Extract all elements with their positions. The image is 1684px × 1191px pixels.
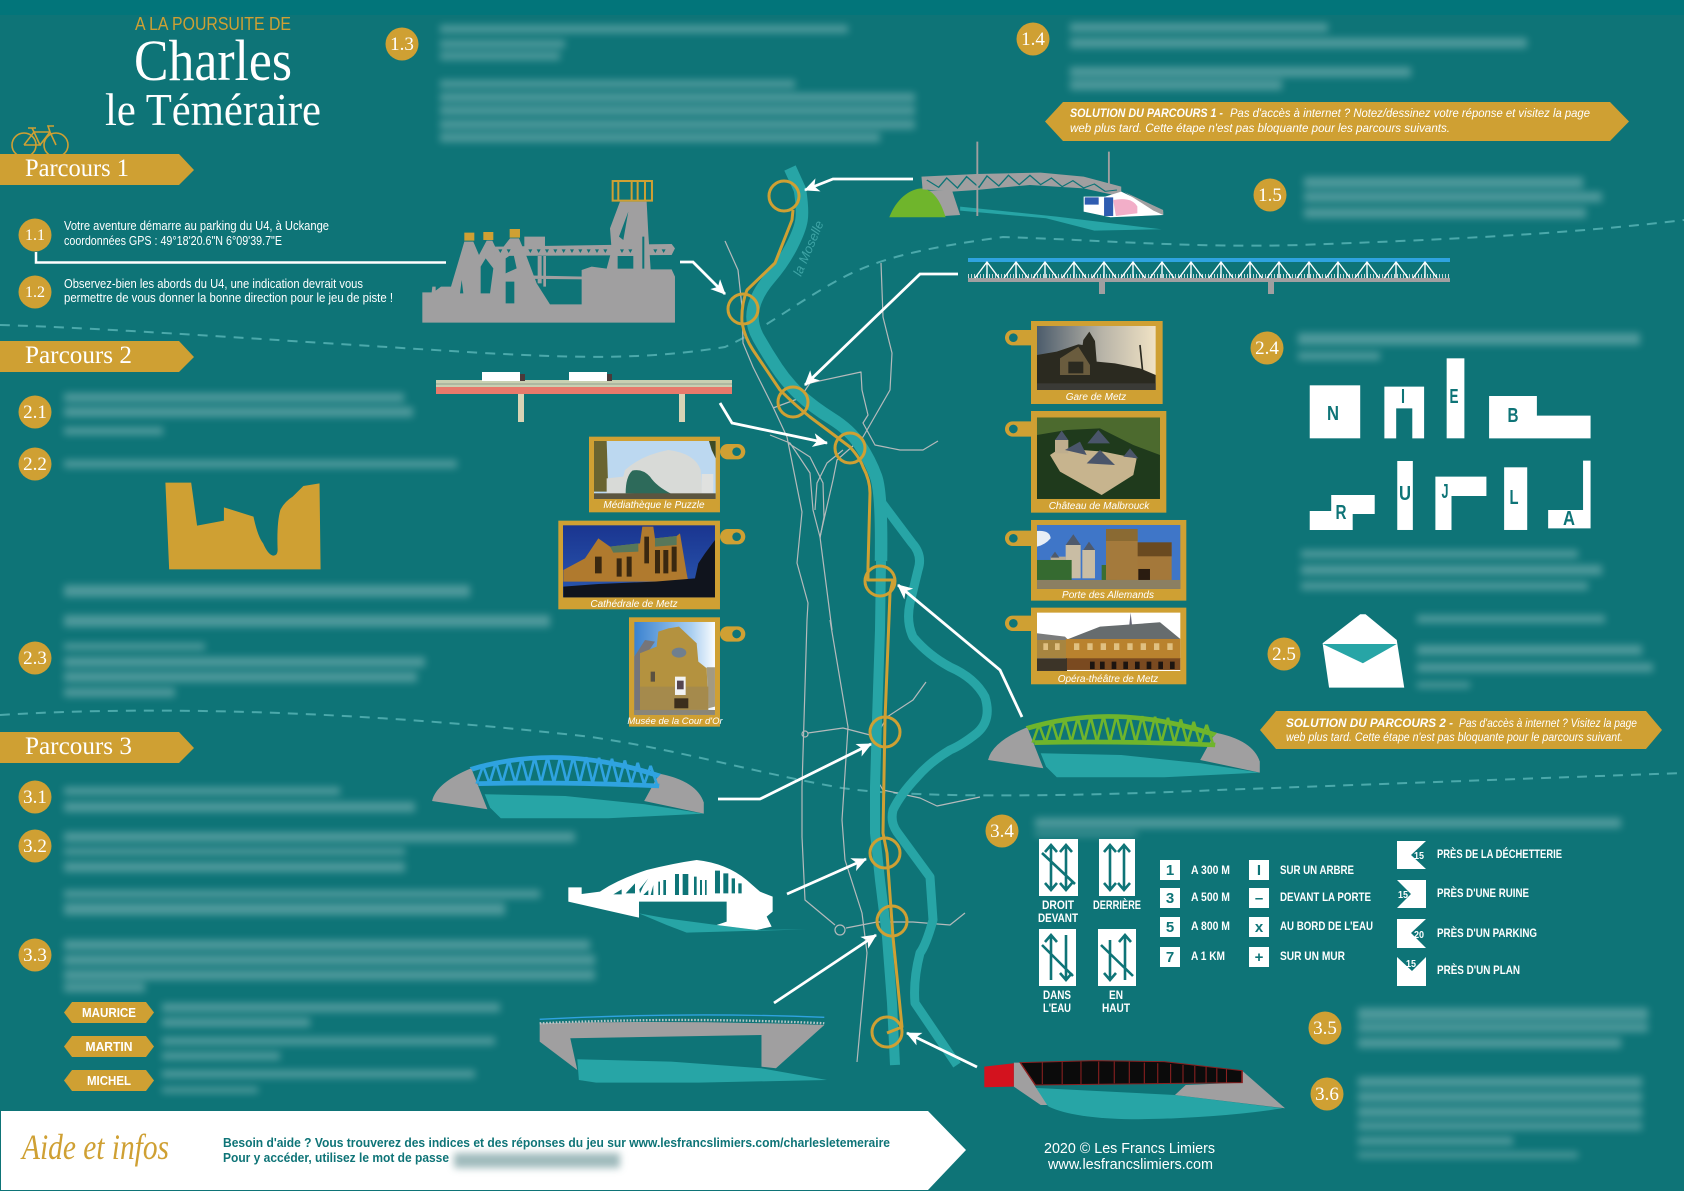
- step 1.2: 1.2: [25, 284, 45, 301]
- step 1.3: [386, 28, 418, 60]
- title: le Téméraire: [105, 84, 321, 135]
- text block 1.4 (blurred): [1070, 23, 1527, 90]
- step 1.1: 1.1: [25, 227, 45, 244]
- text block 2.3 (blurred): [64, 643, 425, 697]
- step 1.5: [1254, 178, 1286, 212]
- legend: trail markers: 15: [1406, 959, 1416, 970]
- legend: direction signs: DROIT: [1042, 900, 1074, 912]
- photo: Porte des Allemands: Porte des Allemands: [1062, 590, 1154, 601]
- callout: solution parcours 1: [1045, 102, 1629, 141]
- callout: solution parcours 2: web plus tard. Cette étape n'est pas bloquante pour le parcours suivant.: [1286, 730, 1623, 744]
- step 2.1: [18, 396, 52, 428]
- illustration: bridge 1.4: [889, 142, 1163, 231]
- text block 1.3 (blurred): [440, 25, 915, 142]
- step 1.1: coordonnées GPS : 49°18'20.6"N 6°09'39.7"E: [64, 233, 282, 248]
- legend: trail markers: 15: [1398, 890, 1408, 901]
- text block 2.4 (blurred): [1298, 333, 1640, 360]
- tag: Martin: [64, 1036, 154, 1057]
- legend: direction signs: DEVANT: [1038, 913, 1078, 925]
- legend: symbol codes: AU BORD DE L'EAU: [1280, 921, 1373, 933]
- illustration: white arch bridge: [568, 860, 807, 933]
- illustration: road bridge 2.1: [436, 372, 732, 422]
- legend: number codes: A 1 KM: [1191, 951, 1225, 963]
- text block 3.3 (blurred): [64, 940, 595, 992]
- step 1.2: [18, 276, 393, 308]
- text block 3.1 (blurred): [64, 787, 415, 812]
- label: la Moselle: la Moselle: [790, 218, 827, 278]
- puzzle: letter blocks: L: [1510, 487, 1518, 509]
- illustration: blue bridge: [432, 757, 704, 818]
- step 3.2: [18, 830, 52, 862]
- puzzle: letter blocks: A: [1563, 508, 1575, 530]
- legend: symbol codes: SUR UN ARBRE: [1280, 865, 1354, 877]
- step 3.6: [1310, 1078, 1344, 1110]
- legend: trail markers: [1397, 841, 1562, 986]
- panel: parcours 2 banner: [0, 341, 194, 372]
- step 1.5: 1.5: [1258, 185, 1282, 206]
- step 2.2: [18, 448, 52, 480]
- legend: direction signs: DERRIÈRE: [1093, 899, 1141, 912]
- step 3.6: 3.6: [1315, 1084, 1339, 1105]
- connector: step 1.1 to U4: [36, 252, 446, 262]
- legend: direction signs: L'EAU: [1043, 1003, 1071, 1015]
- callout: solution parcours 1: Pas d'accès à internet ? Notez/dessinez votre réponse et visitez la page: [1230, 106, 1590, 120]
- step 1.4: [1016, 22, 1050, 56]
- step 3.1: [18, 780, 52, 814]
- map: river Moselle: [752, 168, 987, 1065]
- legend: number codes: 5: [1166, 919, 1174, 936]
- credits: www.lesfrancslimiers.com: [1047, 1156, 1213, 1173]
- step 2.5: 2.5: [1272, 644, 1296, 665]
- photo: Opéra-théâtre de Metz: [1005, 608, 1186, 685]
- tag: Maurice: MAURICE: [82, 1005, 136, 1020]
- legend: number codes: A 300 M: [1191, 865, 1230, 877]
- step 1.1: [18, 218, 329, 252]
- illustration: U4 blast furnace: [422, 181, 675, 323]
- step 3.2: 3.2: [23, 836, 47, 857]
- callout: solution parcours 2: SOLUTION DU PARCOURS 2 -: [1286, 716, 1453, 730]
- puzzle: letter blocks: I: [1401, 386, 1405, 408]
- step 3.4: [986, 814, 1018, 848]
- photo: Château de Malbrouck: [1005, 411, 1166, 513]
- step 2.1: 2.1: [23, 402, 47, 423]
- puzzle: letter blocks: U: [1399, 483, 1411, 505]
- puzzle: letter blocks: N: [1327, 403, 1339, 425]
- panel: parcours 1 banner: [0, 154, 194, 185]
- tag: Maurice: [64, 1002, 154, 1023]
- callout: solution parcours 1: web plus tard. Cette étape n'est pas bloquante pour les parcours suivants.: [1070, 121, 1450, 135]
- photo: Musée de la Cour d'Or: Musée de la Cour d'Or: [627, 716, 723, 727]
- step 2.3: 2.3: [23, 648, 47, 669]
- legend: symbol codes: +: [1255, 949, 1264, 966]
- tag: Michel: MICHEL: [87, 1073, 131, 1088]
- panel: aide et infos footer: Besoin d'aide ? Vous trouverez des indices et des réponses du jeu sur www.lesfrancslimiers.com/charlesletemeraire: [223, 1135, 890, 1150]
- photo: Cathédrale de Metz: Cathédrale de Metz: [590, 599, 678, 610]
- step 1.2: permettre de vous donner la bonne direction pour le jeu de piste !: [64, 290, 393, 305]
- puzzle: letter blocks: [1310, 358, 1591, 530]
- puzzle: letter blocks: E: [1450, 386, 1458, 408]
- step 1.1: Votre aventure démarre au parking du U4, à Uckange: [64, 218, 329, 233]
- text block 3.6 (blurred): [1358, 1077, 1642, 1158]
- text block 2.2 (blurred): [64, 460, 457, 468]
- legend: number codes: A 800 M: [1191, 921, 1230, 933]
- panel: aide et infos footer: Pour y accéder, utilisez le mot de passe: [223, 1150, 449, 1165]
- credits: [1044, 1140, 1215, 1173]
- step 3.5: 3.5: [1313, 1018, 1337, 1039]
- legend: symbol codes: –: [1255, 890, 1263, 907]
- photo: Opéra-théâtre de Metz: Opéra-théâtre de Metz: [1058, 674, 1158, 685]
- credits: 2020 © Les Francs Limiers: [1044, 1140, 1215, 1157]
- step 2.5: [1268, 638, 1300, 670]
- callout: solution parcours 1: SOLUTION DU PARCOURS 1 -: [1070, 106, 1223, 120]
- panel: parcours 2 banner: Parcours 2: [25, 342, 132, 369]
- step 3.3: [18, 938, 52, 972]
- legend: symbol codes: SUR UN MUR: [1280, 951, 1346, 963]
- icon: envelope: [1323, 614, 1404, 688]
- step 1.3: 1.3: [390, 34, 414, 55]
- step 2.3: [18, 642, 52, 674]
- text block 3.5 (blurred): [1358, 1008, 1648, 1048]
- legend: symbol codes: [1249, 860, 1373, 967]
- step 2.4: 2.4: [1255, 338, 1279, 359]
- legend: trail markers: PRÈS D'UN PLAN: [1437, 964, 1520, 977]
- title: Charles: [134, 28, 292, 93]
- photo: Médiathèque le Puzzle: [589, 437, 745, 512]
- legend: number codes: 1: [1166, 862, 1174, 879]
- photo: Porte des Allemands: [1005, 520, 1186, 601]
- puzzle: letter blocks: J: [1442, 481, 1448, 503]
- callout: solution parcours 2: Pas d'accès à internet ? Visitez la page: [1459, 716, 1637, 730]
- illustration: green bridge: [988, 716, 1260, 777]
- panel: parcours 3 banner: [0, 732, 194, 763]
- illustration: gold skyline shape: [165, 483, 321, 569]
- legend: symbol codes: DEVANT LA PORTE: [1280, 892, 1371, 904]
- photo: Gare de Metz: [1005, 321, 1163, 404]
- photo: Gare de Metz: Gare de Metz: [1066, 392, 1126, 403]
- title: [105, 14, 321, 135]
- illustration: truss bridge 1.5: [968, 258, 1450, 294]
- step 3.4: 3.4: [990, 821, 1014, 842]
- legend: trail markers: PRÈS D'UNE RUINE: [1437, 887, 1529, 900]
- legend: trail markers: PRÈS D'UN PARKING: [1437, 927, 1537, 940]
- legend: trail markers: 20: [1414, 930, 1424, 941]
- legend: number codes: 7: [1166, 949, 1174, 966]
- legend: direction signs: DANS: [1043, 990, 1071, 1002]
- step 1.2: Observez-bien les abords du U4, une indication devrait vous: [64, 276, 363, 291]
- legend: number codes: A 500 M: [1191, 892, 1230, 904]
- legend: number codes: [1160, 860, 1230, 967]
- step 3.5: [1308, 1012, 1342, 1044]
- text block 2.1 (blurred): [64, 393, 413, 435]
- legend: symbol codes: x: [1255, 919, 1264, 936]
- panel: parcours 1 banner: Parcours 1: [25, 155, 129, 182]
- legend: direction signs: EN: [1109, 990, 1123, 1002]
- photo: Château de Malbrouck: Château de Malbrouck: [1049, 501, 1150, 512]
- text block 1.5 (blurred): [1304, 177, 1602, 218]
- legend: direction signs: [1038, 839, 1141, 1015]
- map: gold cycle route: [728, 181, 907, 1047]
- icon: bicycle: [12, 126, 68, 157]
- panel: parcours 3 banner: Parcours 3: [25, 733, 132, 760]
- step 1.4: 1.4: [1021, 29, 1045, 50]
- puzzle: letter blocks: B: [1508, 405, 1518, 427]
- step 2.2: 2.2: [23, 454, 47, 475]
- text block: tag descriptions (blurred): [162, 1003, 500, 1093]
- text block 2.5 (blurred): [1417, 615, 1653, 688]
- title: A LA POURSUITE DE: [135, 14, 291, 34]
- tag: Michel: [64, 1070, 154, 1091]
- text block 3.2 (blurred): [64, 832, 575, 915]
- step 2.4: [1250, 332, 1284, 364]
- text block 2.2 continued (blurred): [64, 585, 550, 627]
- illustration: red and black bridge: [984, 1061, 1285, 1119]
- text block 3.4 (blurred): [1035, 818, 1621, 836]
- panel: aide et infos footer: Aide et infos: [20, 1127, 169, 1167]
- legend: number codes: 3: [1166, 890, 1174, 907]
- photo: Cathédrale de Metz: [558, 521, 745, 610]
- step 3.1: 3.1: [23, 787, 47, 808]
- photo: Médiathèque le Puzzle: Médiathèque le Puzzle: [603, 500, 705, 511]
- photo: Musée de la Cour d'Or: [627, 617, 745, 727]
- legend: symbol codes: I: [1257, 862, 1261, 879]
- legend: trail markers: PRÈS DE LA DÉCHETTERIE: [1437, 848, 1562, 861]
- map: roads: [725, 241, 980, 1062]
- callout: solution parcours 2: [1260, 711, 1662, 749]
- text block 2.4 continued (blurred): [1301, 550, 1602, 590]
- panel: aide et infos footer: [1, 1111, 966, 1190]
- puzzle: letter blocks: R: [1336, 502, 1347, 524]
- step 3.3: 3.3: [23, 945, 47, 966]
- legend: direction signs: HAUT: [1102, 1003, 1130, 1015]
- legend: trail markers: 15: [1414, 851, 1424, 862]
- tag: Martin: MARTIN: [86, 1039, 132, 1054]
- illustration: concrete bridge 3.3: [540, 1015, 827, 1083]
